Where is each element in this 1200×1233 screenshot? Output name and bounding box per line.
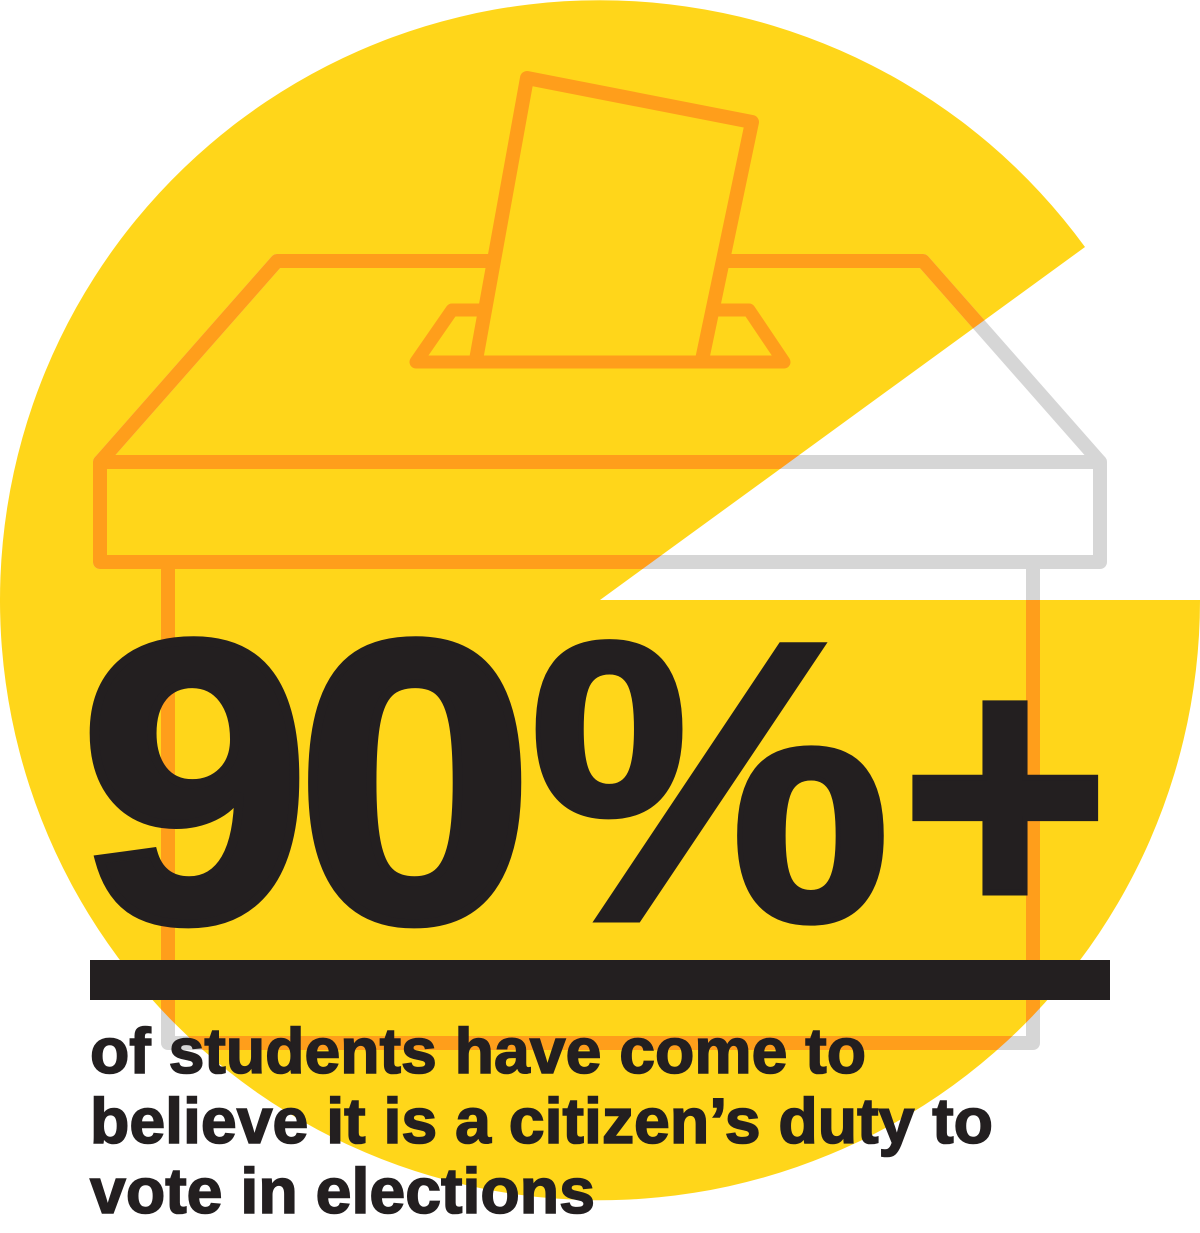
big number: + (900, 584, 1110, 1001)
caption text: vote in elections (90, 1155, 595, 1227)
big number: 9 (80, 558, 310, 1005)
caption text: of students have come to (90, 1015, 866, 1087)
divider bar (90, 960, 1110, 1000)
big number (80, 558, 1110, 1005)
caption text: believe it is a citizen’s duty to (90, 1085, 993, 1157)
icon: ballot box and ballot paper in orange (100, 78, 1100, 1043)
icon: ballot box outline outside pie (100, 261, 1100, 1043)
big number: % (528, 558, 892, 1005)
big number: 0 (296, 558, 534, 1005)
caption text (90, 1015, 993, 1227)
